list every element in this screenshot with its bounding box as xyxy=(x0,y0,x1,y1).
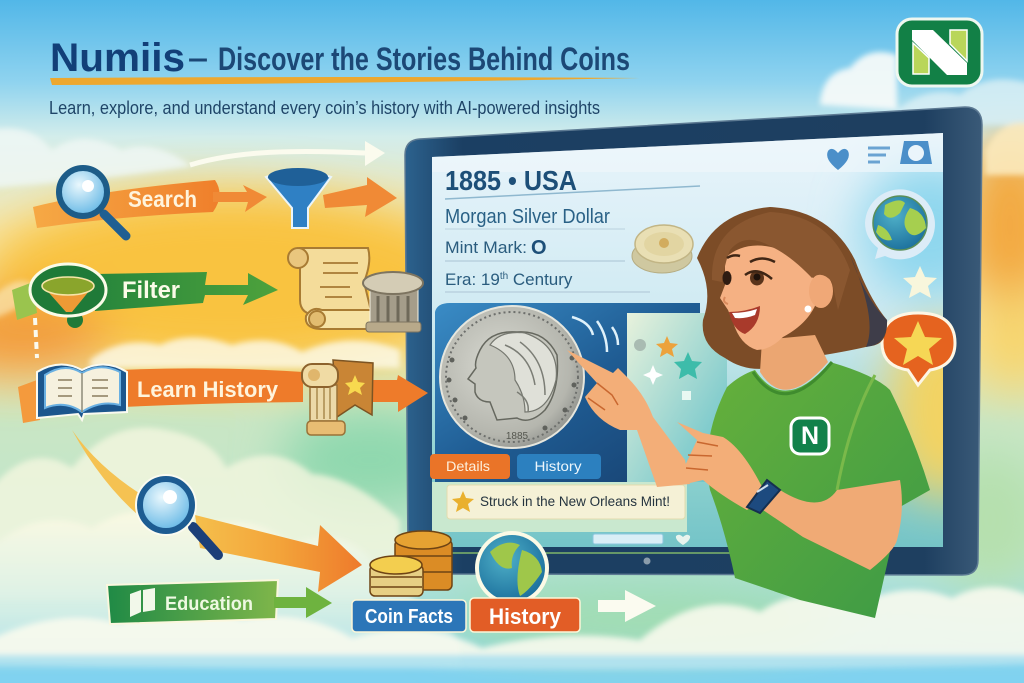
hand: lower xyxy=(677,422,767,510)
icon: small gold coin xyxy=(632,225,693,273)
finger shading xyxy=(588,383,618,410)
ear xyxy=(804,274,833,312)
label: coin facts xyxy=(352,600,466,632)
coin details xyxy=(445,165,700,292)
title: Discover the Stories Behind Coins xyxy=(218,41,630,77)
arrow xyxy=(274,587,332,618)
torso shirt xyxy=(707,362,930,618)
coin details: Mint Mark: xyxy=(445,238,527,257)
flow: search: Search xyxy=(128,186,197,212)
arm: upper pointing xyxy=(567,350,690,487)
coin details: Era: 19 xyxy=(445,270,500,289)
hand lines xyxy=(686,442,718,470)
tablet frame xyxy=(405,107,982,575)
title xyxy=(50,36,640,85)
coin details: Morgan Silver Dollar xyxy=(445,206,610,228)
blue coin panel xyxy=(435,303,700,482)
character xyxy=(567,207,930,618)
coin details: 1885 • USA xyxy=(445,165,577,196)
icon: book xyxy=(37,364,127,420)
flow: learn history xyxy=(18,360,428,435)
buttons: Details xyxy=(446,458,490,474)
icons: header xyxy=(827,141,932,170)
header bar xyxy=(432,133,943,172)
silver coin xyxy=(440,306,584,448)
fact banner background xyxy=(432,482,687,532)
icon: screen globe xyxy=(865,189,935,259)
arrow xyxy=(213,185,267,212)
buttons xyxy=(430,454,601,479)
hair back xyxy=(697,207,887,369)
label: history: History xyxy=(489,604,562,629)
icon: speech star xyxy=(882,313,955,385)
icon: bottom globe xyxy=(475,531,549,605)
icon: scroll and columns xyxy=(288,248,423,332)
sleeve seam xyxy=(837,375,875,490)
coin stack icons xyxy=(370,531,452,596)
face xyxy=(720,246,820,350)
icon: large magnifier xyxy=(135,474,218,555)
coin details: Century xyxy=(508,270,573,289)
buttons: History xyxy=(534,458,582,474)
title: – xyxy=(188,42,208,75)
title: Numiis xyxy=(50,36,185,80)
watch xyxy=(747,480,780,513)
silver coin: 1885 xyxy=(506,431,529,442)
neck xyxy=(760,335,828,390)
label: history xyxy=(470,598,580,632)
flow: education: Education xyxy=(165,594,253,615)
fact banner xyxy=(447,485,685,519)
dashed link xyxy=(35,318,37,358)
screen colour wash xyxy=(834,152,943,528)
top decorative arrow xyxy=(190,141,385,166)
coin details: th xyxy=(500,271,508,282)
arm: lower forearm xyxy=(763,480,902,570)
icon: funnel xyxy=(266,168,331,228)
arrow: funnel to tablet xyxy=(323,177,397,217)
icon: open map xyxy=(130,588,155,617)
flow: learn history: Learn History xyxy=(137,377,279,402)
icon: filter funnel xyxy=(30,264,106,328)
arrow: to the right xyxy=(598,590,656,622)
arrow to coin xyxy=(370,375,428,412)
icon: shirt logo xyxy=(791,418,829,454)
facial features xyxy=(722,255,775,334)
subtitle: Learn, explore, and understand every coin’s history with AI-powered insights xyxy=(49,98,600,118)
icon: magnifier xyxy=(59,168,126,236)
side image panel xyxy=(627,313,727,482)
icon: shirt logo: N xyxy=(801,422,819,450)
tablet xyxy=(405,107,1005,575)
hair fringe xyxy=(712,212,850,310)
icon: star xyxy=(903,266,937,298)
logo badge xyxy=(897,19,982,86)
label: coin facts: Coin Facts xyxy=(365,606,453,628)
fact banner: Struck in the New Orleans Mint! xyxy=(480,493,670,509)
flow: education xyxy=(107,580,332,624)
collar xyxy=(753,362,832,394)
star accents xyxy=(634,336,702,400)
bottom controls xyxy=(450,534,760,564)
coin details: O xyxy=(531,237,547,259)
flow: curved arrow to coin facts xyxy=(72,430,362,592)
flow: search xyxy=(33,168,397,236)
flow: filter xyxy=(12,248,423,358)
icon: column with ribbon xyxy=(302,360,373,435)
tablet screen xyxy=(432,133,943,547)
motion strokes xyxy=(572,317,618,352)
flow: filter: Filter xyxy=(122,277,180,304)
